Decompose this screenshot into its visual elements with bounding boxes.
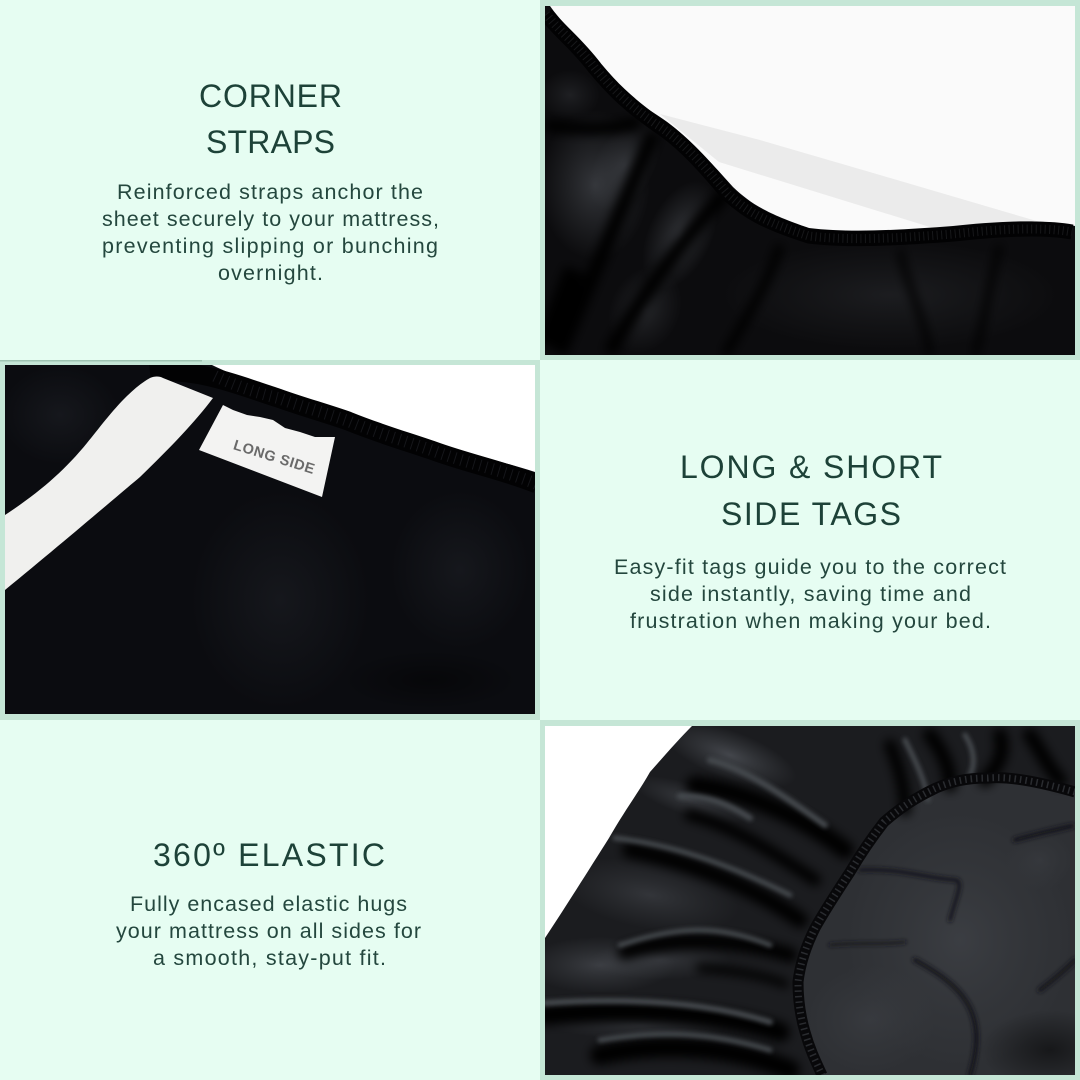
text block: elastic description: Fully encased elastic hugs [130, 892, 407, 916]
elastic hem [150, 371, 537, 484]
black fabric [545, 6, 1075, 355]
heading: corner straps: STRAPS [206, 124, 335, 160]
text block: corner straps description: sheet securely to your mattress, [102, 207, 439, 231]
dark gathers [545, 735, 1060, 1070]
flat centre of the sheet [798, 778, 1075, 1075]
heading: corner straps: CORNER [199, 78, 342, 114]
text block: side tags description: side instantly, saving time and [650, 582, 971, 606]
text block: corner straps description [102, 180, 439, 285]
text block: corner straps description: Reinforced straps anchor the [117, 180, 423, 204]
panel: 360 elastic photo [525, 709, 1080, 1080]
heading: corner straps [199, 78, 342, 160]
text block: side tags description: frustration when making your bed. [630, 609, 991, 633]
text block: corner straps description: overnight. [218, 261, 323, 285]
text block: corner straps description: preventing slipping or bunching [102, 234, 438, 258]
fabric sheen [550, 80, 1072, 340]
heading: long and short side tags: SIDE TAGS [721, 496, 901, 532]
satin highlights [545, 735, 973, 1050]
long side label: LONG SIDE [231, 438, 317, 478]
heading: long and short side tags: LONG & SHORT [680, 449, 942, 485]
text block: elastic description: your mattress on all sides for [116, 919, 421, 943]
text block: elastic description [116, 892, 421, 970]
panel: corner straps photo [540, 0, 1080, 366]
heading: 360 elastic: 360º ELASTIC [153, 837, 385, 873]
heading: long and short side tags [680, 449, 942, 532]
black fabric [5, 365, 535, 714]
soft light areas on gathers [545, 729, 783, 1032]
elastic hem [798, 778, 1075, 1075]
panel: long side tag photo [0, 360, 540, 720]
text block: elastic description: a smooth, stay-put fit. [153, 946, 386, 970]
panel: 360 elastic text [116, 837, 421, 970]
text block: side tags description: Easy-fit tags guide you to the correct [614, 555, 1006, 579]
long side label [199, 405, 335, 497]
fabric sheen [0, 365, 530, 710]
fabric creases [545, 122, 1000, 355]
creases in flat sheet [830, 826, 1075, 1075]
text block: side tags description [614, 555, 1006, 633]
elastic hem [546, 14, 1072, 239]
panel: long and short side tags text [614, 449, 1006, 633]
white corner strap [5, 376, 213, 590]
strap in background [660, 114, 1040, 232]
fabric, left gathers [545, 726, 1075, 1075]
panel: corner straps text [102, 78, 439, 285]
